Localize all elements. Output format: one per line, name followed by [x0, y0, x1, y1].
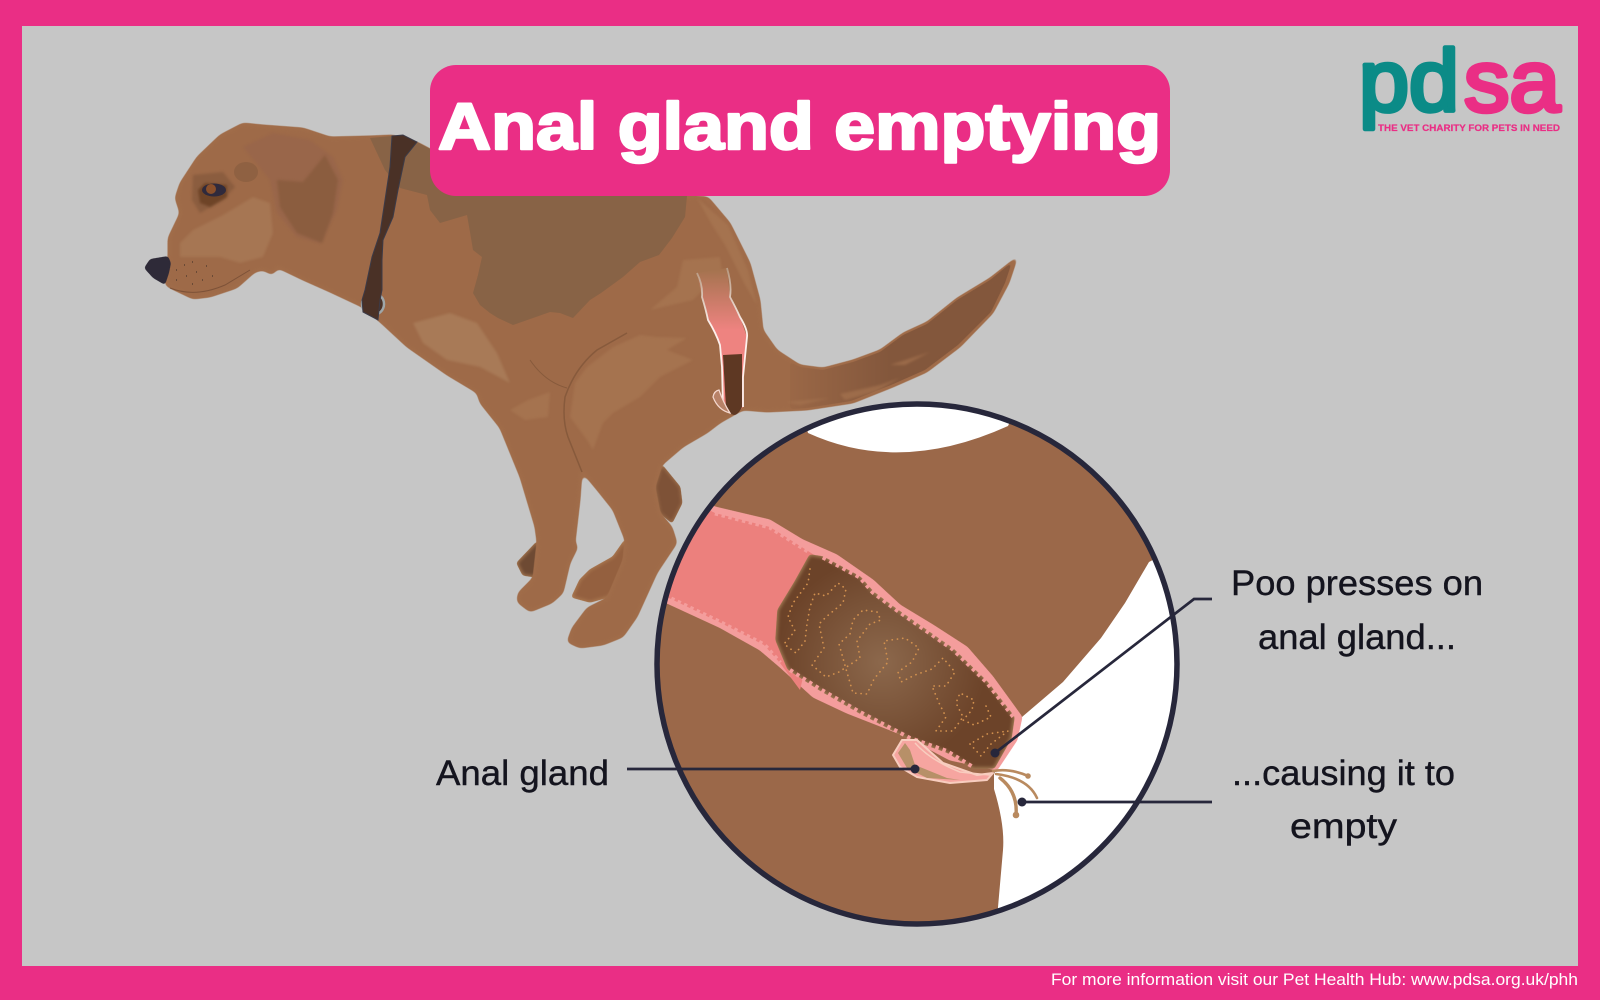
footer text: For more information visit our Pet Health Hub: www.pdsa.org.uk/phh	[1051, 970, 1578, 989]
thigh crease	[564, 333, 627, 472]
title banner	[430, 65, 1170, 196]
mouth line	[170, 270, 250, 292]
mucosa teeth lower	[671, 599, 780, 663]
gland inner line	[915, 743, 990, 775]
label: poo presses on anal gland: anal gland...	[1258, 618, 1456, 657]
eye shadow	[198, 183, 227, 207]
collar	[362, 135, 417, 320]
gland fluid	[898, 743, 960, 780]
rectum lumen	[668, 511, 814, 690]
leader line: poo presses	[990, 599, 1212, 758]
dog body	[165, 123, 1018, 648]
PDSA logo: sa	[1464, 33, 1561, 130]
gland discharge	[993, 770, 1037, 817]
white gap right	[994, 560, 1174, 908]
brow spot	[234, 162, 258, 182]
small poo	[723, 354, 742, 415]
far hind paw	[572, 540, 630, 602]
saddle patch	[370, 136, 690, 325]
tail highlights	[785, 352, 930, 405]
leader line: anal gland	[627, 764, 920, 774]
far front paw	[517, 542, 545, 577]
white gap top	[808, 406, 1009, 452]
label: causing it to empty: ...causing it to	[1232, 754, 1455, 793]
belly crease	[530, 360, 567, 388]
label: poo presses on anal gland	[1231, 564, 1483, 657]
circle outline	[657, 404, 1177, 924]
tail shading	[790, 262, 1012, 409]
label: poo presses on anal gland: Poo presses on	[1231, 564, 1483, 603]
shoulder highlight	[413, 313, 510, 383]
mucosa teeth upper	[715, 513, 808, 551]
eye	[202, 184, 226, 196]
PDSA logo	[1359, 33, 1561, 134]
label: anal gland: Anal gland	[436, 754, 609, 793]
anal gland	[893, 740, 993, 783]
ear	[243, 133, 343, 243]
PDSA logo: pd	[1359, 33, 1459, 130]
hip highlight	[650, 257, 725, 310]
thigh highlight	[570, 335, 693, 450]
poo dotted texture	[784, 569, 1008, 756]
muzzle highlight	[180, 197, 273, 263]
small anal gland	[713, 390, 730, 413]
front leg highlight	[510, 392, 550, 420]
leader line: causing it to empty	[1018, 798, 1212, 806]
title banner: Anal gland emptying	[438, 89, 1161, 163]
rump highlight	[697, 198, 757, 305]
nose	[144, 256, 171, 285]
label: causing it to empty: empty	[1290, 807, 1398, 846]
poo teeth upper	[823, 557, 1014, 717]
magnified circle	[640, 400, 1190, 930]
whisker dots	[176, 262, 213, 284]
poo teeth lower	[790, 670, 973, 767]
ear inner patch	[277, 155, 338, 243]
circle interior	[640, 400, 1190, 930]
illustration: dog squatting	[144, 123, 1018, 648]
PDSA logo: THE VET CHARITY FOR PETS IN NEED	[1378, 123, 1560, 134]
rectum tube	[667, 506, 1022, 770]
far hind leg	[655, 465, 682, 523]
eye patch	[192, 172, 235, 213]
label: causing it to empty	[1232, 754, 1455, 846]
small rectum view	[697, 268, 747, 415]
poo	[776, 555, 1014, 768]
